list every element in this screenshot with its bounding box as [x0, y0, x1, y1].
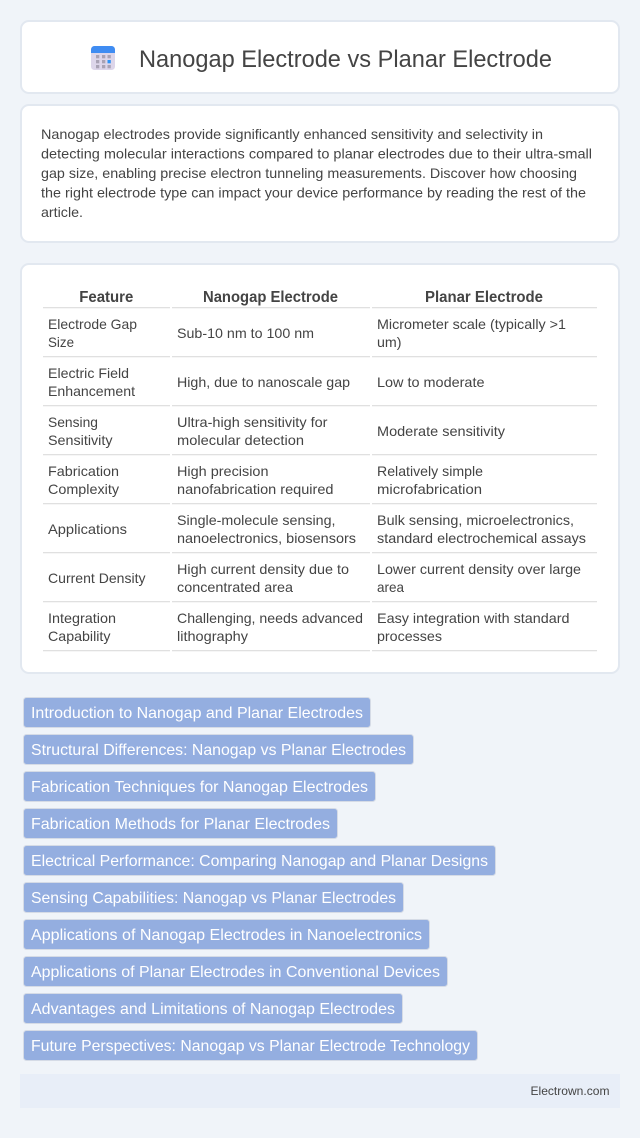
table row: fabrication complexity	[48, 463, 483, 497]
table header row: Planar Electrode	[425, 289, 543, 306]
text block: introduction paragraph: gap size, enabling precise electron tunneling measurements. Discover how choosing	[41, 165, 577, 181]
table row: integration capability: processes	[377, 628, 442, 644]
link pill: advantages and limitations	[24, 994, 402, 1024]
table row: current density: area	[377, 579, 404, 595]
table header row: Feature	[79, 289, 134, 306]
footer: Electrown.com	[530, 1084, 610, 1098]
table row: integration capability: lithography	[177, 628, 248, 644]
footer	[20, 1074, 620, 1108]
table header row	[79, 289, 543, 306]
table row: electric field enhancement: Low to moderate	[377, 374, 485, 390]
table row: sensing sensitivity: Sensing	[48, 414, 98, 430]
table row: fabrication complexity: nanofabrication required	[177, 481, 334, 497]
table row: electrode gap size: Sub-10 nm to 100 nm	[177, 325, 314, 341]
table row: sensing sensitivity: Sensitivity	[48, 432, 112, 448]
table row: fabrication complexity: Complexity	[48, 481, 119, 497]
link pill: planar fabrication methods: Fabrication Methods for Planar Electrodes	[31, 816, 330, 833]
link pill: electrical performance: Electrical Performance: Comparing Nanogap and Planar Designs	[31, 853, 488, 870]
link pill: introduction: Introduction to Nanogap and Planar Electrodes	[31, 705, 363, 722]
text block: introduction paragraph: detecting molecular interactions compared to planar electrodes due to their ultra-small	[41, 146, 592, 162]
table row: fabrication complexity: Relatively simple	[377, 463, 483, 479]
table row: electrode gap size: Size	[48, 334, 74, 350]
table row: applications: Applications	[48, 521, 127, 537]
link pill: advantages and limitations: Advantages and Limitations of Nanogap Electrodes	[31, 1001, 395, 1018]
link pill: electrical performance	[24, 846, 496, 876]
table row: applications	[48, 512, 586, 546]
link pill: structural differences: Structural Differences: Nanogap vs Planar Electrodes	[31, 742, 406, 759]
table row: current density: concentrated area	[177, 579, 293, 595]
table row: electric field enhancement: High, due to nanoscale gap	[177, 374, 350, 390]
table row: integration capability	[48, 610, 570, 644]
link pill: planar applications: Applications of Planar Electrodes in Conventional Devices	[31, 964, 440, 981]
table row: sensing sensitivity	[48, 414, 505, 448]
text block: introduction paragraph	[41, 126, 592, 220]
link pill: future perspectives: Future Perspectives: Nanogap vs Planar Electrode Technology	[31, 1038, 470, 1055]
table row: integration capability: Easy integration with standard	[377, 610, 570, 626]
link pill: planar applications	[24, 956, 448, 986]
table row: sensing sensitivity: Moderate sensitivity	[377, 423, 505, 439]
table row: electrode gap size: um)	[377, 334, 402, 350]
link pill: sensing capabilities: Sensing Capabilities: Nanogap vs Planar Electrodes	[31, 890, 396, 907]
table row: electrode gap size	[48, 316, 566, 350]
link pill: nanogap fabrication techniques	[24, 772, 376, 802]
text block: introduction paragraph: article.	[41, 204, 83, 220]
table row: current density: Current Density	[48, 570, 146, 586]
table row: integration capability: Challenging, needs advanced	[177, 610, 363, 626]
link pill: sensing capabilities	[24, 882, 404, 912]
table row: electric field enhancement: Electric Field	[48, 365, 129, 381]
link pill: nanogap applications: Applications of Nanogap Electrodes in Nanoelectronics	[31, 927, 422, 944]
link pill: planar fabrication methods	[24, 808, 338, 838]
link pill: structural differences	[24, 734, 414, 764]
panel: comparison table	[21, 264, 619, 673]
table row: fabrication complexity: Fabrication	[48, 463, 119, 479]
table row: fabrication complexity: High precision	[177, 463, 268, 479]
table row: electrode gap size: Micrometer scale (typically >1	[377, 316, 566, 332]
text block: introduction paragraph: the right electrode type can impact your device performance by reading the rest of the	[41, 184, 586, 200]
text block: introduction paragraph: Nanogap electrodes provide significantly enhanced sensitivity and selectivity in	[41, 126, 543, 142]
table row: applications: Single-molecule sensing,	[177, 512, 336, 528]
link pill: future perspectives	[24, 1030, 478, 1060]
table row: current density: Lower current density over large	[377, 561, 581, 577]
section link list	[24, 698, 496, 1060]
table row: integration capability: Capability	[48, 628, 110, 644]
table row: electric field enhancement: Enhancement	[48, 383, 135, 399]
table row: current density	[48, 561, 581, 595]
link pill: introduction	[24, 698, 370, 728]
panel: header	[21, 21, 619, 93]
table row: fabrication complexity: microfabrication	[377, 481, 482, 497]
title: Nanogap Electrode vs Planar Electrode	[139, 46, 552, 73]
table header row: Nanogap Electrode	[203, 289, 338, 306]
table row: applications: nanoelectronics, biosensors	[177, 530, 356, 546]
panel: introduction	[21, 105, 619, 242]
table row: sensing sensitivity: molecular detection	[177, 432, 304, 448]
link pill: nanogap fabrication techniques: Fabrication Techniques for Nanogap Electrodes	[31, 779, 368, 796]
table row: current density: High current density due to	[177, 561, 349, 577]
icon: calendar	[91, 46, 115, 70]
link pill: nanogap applications	[24, 920, 430, 950]
table row: applications: Bulk sensing, microelectronics,	[377, 512, 574, 528]
table row: applications: standard electrochemical assays	[377, 530, 586, 546]
table row: sensing sensitivity: Ultra-high sensitivity for	[177, 414, 328, 430]
table row: integration capability: Integration	[48, 610, 116, 626]
table row: electric field enhancement	[48, 365, 485, 399]
table row: electrode gap size: Electrode Gap	[48, 316, 137, 332]
